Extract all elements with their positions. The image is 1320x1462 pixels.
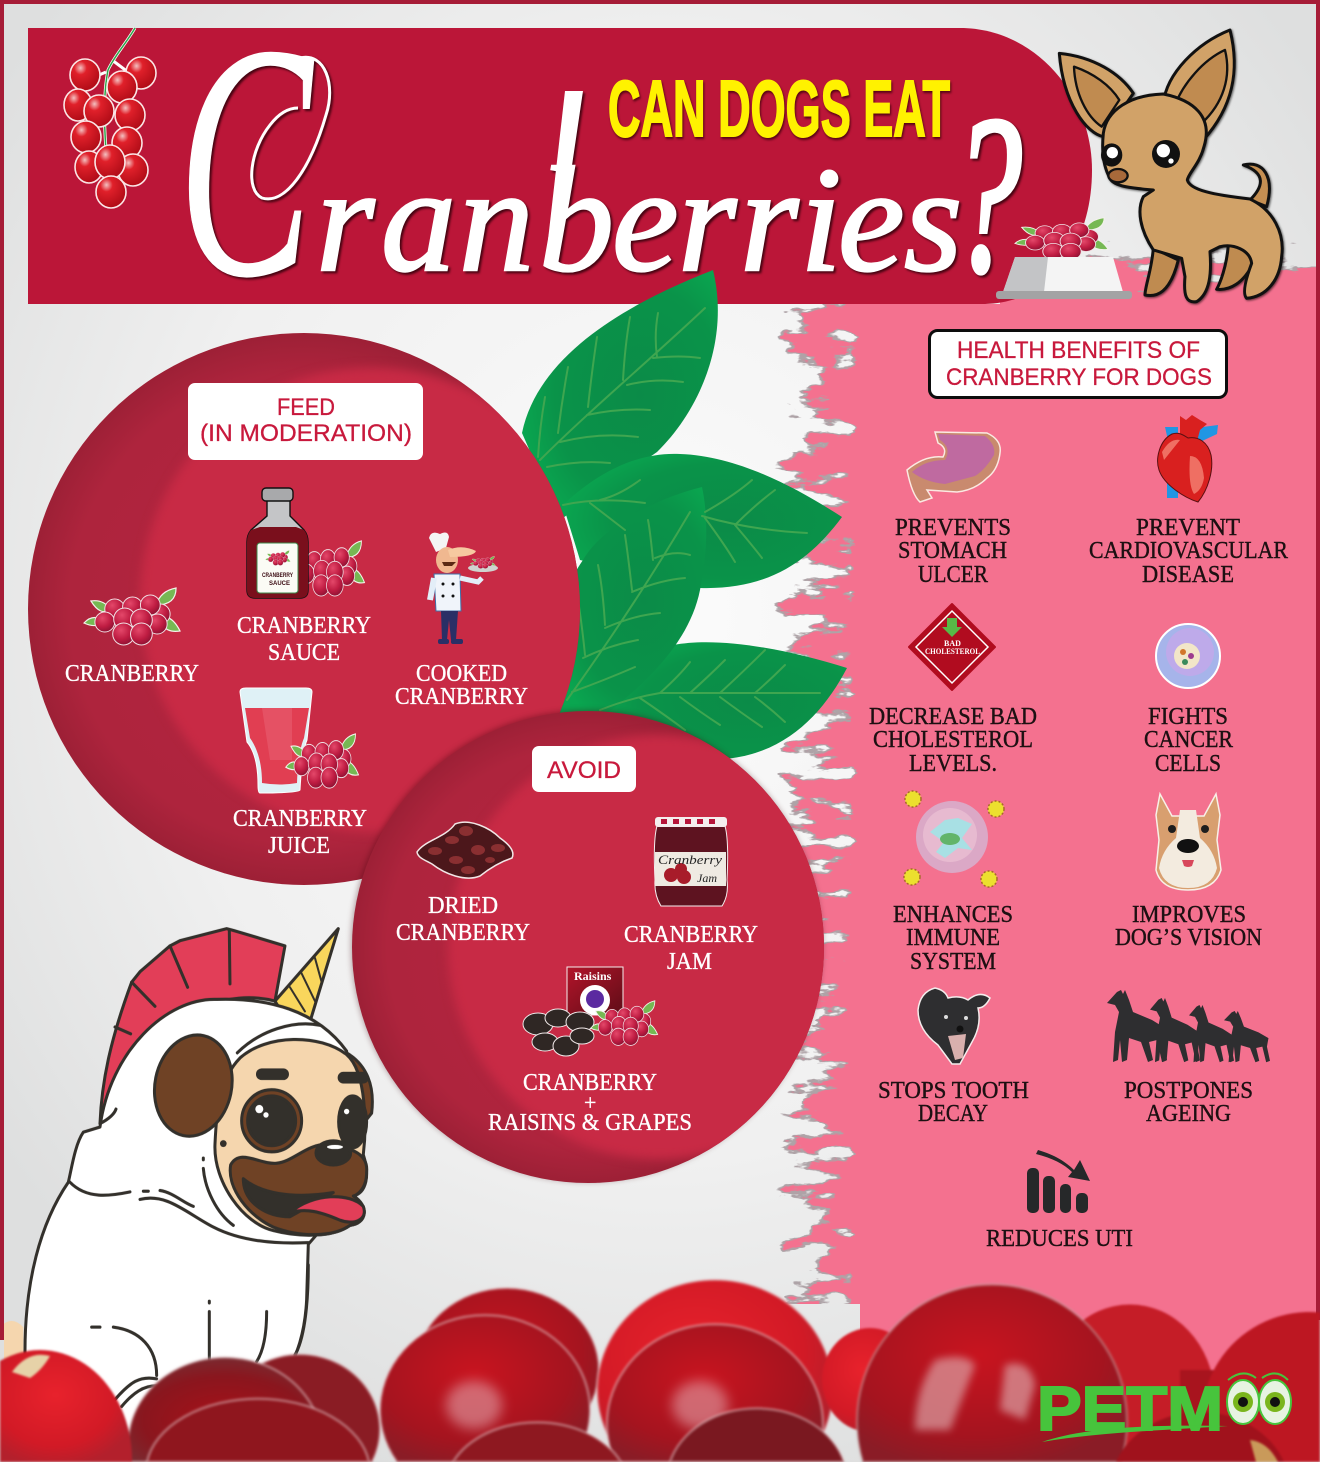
icon: sauce bottle: CRANBERRY	[262, 573, 293, 579]
feed label: FEED	[277, 394, 335, 421]
icon: heart	[1158, 415, 1218, 502]
label: prevents stomach ulcer: ULCER	[918, 562, 988, 588]
icon: cancer cell	[1156, 624, 1220, 688]
label: prevents stomach ulcer	[895, 515, 1011, 588]
icon: red berry cluster	[64, 28, 156, 208]
icon: chef	[429, 533, 498, 644]
icon: declining bar chart	[1027, 1150, 1090, 1213]
icon: raisins box with berries	[523, 967, 658, 1056]
label: fights cancer cells	[1144, 704, 1233, 777]
icon: sauce bottle	[247, 488, 364, 598]
label: prevent cardiovascular disease: DISEASE	[1142, 562, 1234, 588]
icon: dried cranberry	[417, 822, 513, 878]
illustration: fresh cranberries	[0, 1280, 1320, 1462]
heading: can dogs eat: CAN DOGS EAT	[608, 64, 950, 153]
icon: cranberry	[84, 588, 180, 645]
label: stops tooth decay: DECAY	[918, 1101, 988, 1127]
label: cooked cranberry: CRANBERRY	[395, 684, 528, 710]
label: enhances immune system	[893, 902, 1013, 975]
label: fights cancer cells: CANCER	[1144, 727, 1233, 753]
avoid label: AVOID	[547, 757, 621, 784]
label: postpones ageing: AGEING	[1146, 1101, 1231, 1127]
label: cranberry juice	[233, 806, 367, 859]
label: prevent cardiovascular disease: PREVENT	[1136, 515, 1240, 541]
label: postpones ageing	[1124, 1078, 1253, 1127]
label: stops tooth decay: STOPS TOOTH	[878, 1078, 1029, 1104]
title: Cranberries?	[178, 0, 1022, 347]
logo: petmoo: PETM	[1037, 1375, 1223, 1444]
logo: petmoo	[1037, 1373, 1291, 1444]
label: prevents stomach ulcer: STOMACH	[898, 538, 1007, 564]
label: cranberry jam	[624, 922, 758, 975]
label: cranberry plus raisins and grapes: RAISINS & GRAPES	[488, 1110, 692, 1136]
title: Cranberries?: erries	[612, 137, 962, 303]
icon: jam jar: Jam	[697, 871, 717, 885]
icon: bad cholesterol	[909, 604, 995, 690]
label: decrease bad cholesterol levels	[869, 704, 1037, 777]
label: improves dogs vision: DOG’S VISION	[1115, 925, 1262, 951]
label: dried cranberry	[396, 893, 530, 946]
icon: angry black dog	[918, 988, 990, 1064]
label: cranberry plus raisins and grapes	[488, 1070, 692, 1136]
icon: jam jar	[654, 817, 728, 906]
title: Cranberries?: b	[539, 137, 614, 303]
label: dried cranberry: DRIED	[428, 893, 498, 919]
icon: cranberry bowl	[996, 218, 1132, 299]
label: improves dogs vision: IMPROVES	[1132, 902, 1246, 928]
feed label: (IN MODERATION)	[200, 420, 412, 447]
label: stops tooth decay	[878, 1078, 1029, 1127]
illustration: pug in unicorn costume	[4, 929, 372, 1451]
label: cranberry plus raisins and grapes: CRANBERRY	[523, 1070, 657, 1096]
label: reduces uti: REDUCES UTI	[986, 1226, 1133, 1252]
panel: feed in moderation	[28, 333, 604, 885]
title: Cranberries?: ran	[316, 137, 534, 303]
label: decrease bad cholesterol levels: DECREASE BAD	[869, 704, 1037, 730]
icon: raisins box with berries: Raisins	[574, 969, 612, 983]
icon: immune system	[904, 791, 1004, 887]
label: cranberry jam: JAM	[667, 949, 712, 975]
label: cranberry sauce: CRANBERRY	[237, 613, 371, 639]
icon: stomach	[907, 432, 1000, 502]
label: fights cancer cells: CELLS	[1155, 751, 1221, 777]
icon: bad cholesterol: BAD	[944, 639, 961, 648]
label: prevent cardiovascular disease	[1089, 515, 1288, 588]
label: enhances immune system: IMMUNE	[906, 925, 1000, 951]
icon: bad cholesterol: CHOLESTEROL	[925, 647, 980, 656]
label: cooked cranberry: COOKED	[416, 661, 507, 687]
panel: avoid	[352, 711, 872, 1183]
icon: sauce bottle: SAUCE	[269, 581, 290, 587]
panel: health benefits	[869, 330, 1288, 1252]
title: Cranberries?: ?	[952, 70, 1022, 319]
icon: four dogs	[1107, 990, 1270, 1062]
feed label	[188, 383, 423, 460]
label: cranberry jam: CRANBERRY	[624, 922, 758, 948]
label: postpones ageing: POSTPONES	[1124, 1078, 1253, 1104]
health benefits heading	[930, 330, 1226, 398]
label: cranberry plus raisins and grapes: +	[584, 1090, 596, 1115]
label: prevent cardiovascular disease: CARDIOVASCULAR	[1089, 538, 1288, 564]
label: enhances immune system: SYSTEM	[910, 949, 996, 975]
leaves	[522, 270, 847, 762]
label: cranberry sauce: SAUCE	[268, 640, 340, 666]
avoid label	[532, 746, 636, 792]
health benefits heading: CRANBERRY FOR DOGS	[946, 364, 1212, 391]
label: cooked cranberry	[395, 661, 528, 710]
label: cranberry sauce	[237, 613, 371, 666]
label: cranberry: CRANBERRY	[65, 661, 199, 687]
panel: header banner	[28, 28, 1092, 304]
label: decrease bad cholesterol levels: CHOLESTEROL	[873, 727, 1033, 753]
label: dried cranberry: CRANBERRY	[396, 920, 530, 946]
label: enhances immune system: ENHANCES	[893, 902, 1013, 928]
label: cranberry juice: CRANBERRY	[233, 806, 367, 832]
label: improves dogs vision	[1115, 902, 1262, 951]
panel: pink health benefits background	[762, 235, 1316, 1400]
label: decrease bad cholesterol levels: LEVELS.	[909, 751, 997, 777]
label: fights cancer cells: FIGHTS	[1148, 704, 1228, 730]
label: prevents stomach ulcer: PREVENTS	[895, 515, 1011, 541]
icon: jam jar: Cranberry	[658, 852, 722, 867]
icon: chihuahua dog	[1059, 30, 1282, 302]
icon: juice glass	[240, 688, 358, 793]
icon: dog face	[1156, 794, 1221, 890]
label: cranberry juice: JUICE	[268, 833, 330, 859]
health benefits heading: HEALTH BENEFITS OF	[957, 337, 1200, 364]
